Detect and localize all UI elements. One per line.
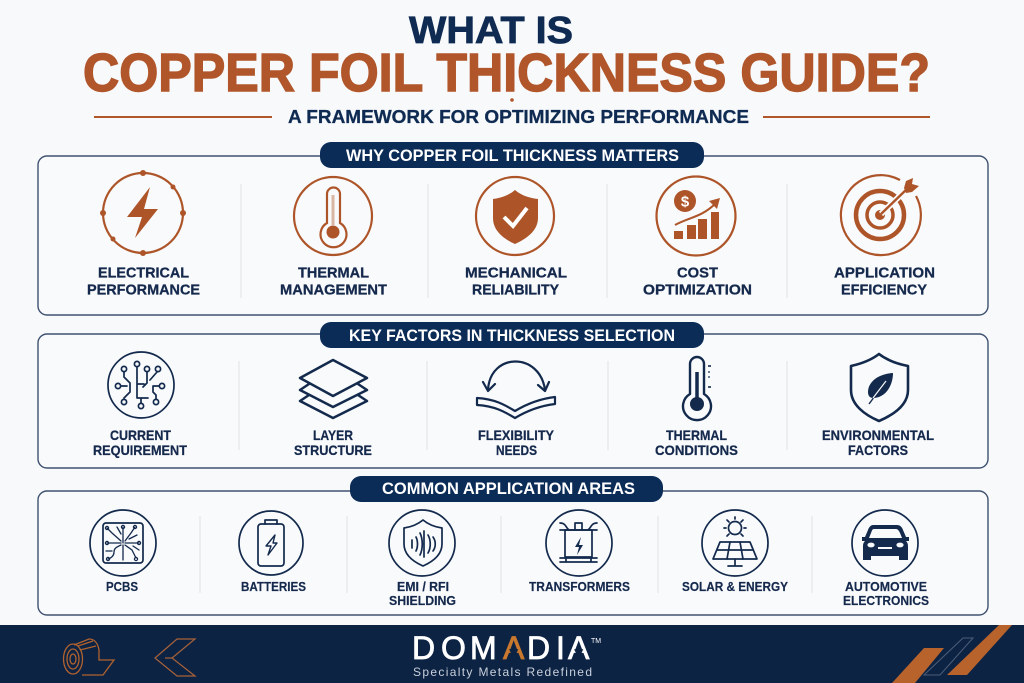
label: layer structure: STRUCTURE: [294, 442, 372, 458]
panel: key factors in thickness selection: [38, 322, 988, 468]
heading: common application areas: [350, 476, 663, 502]
label: EMI / RFI shielding: SHIELDING: [389, 593, 456, 608]
decorative stripes icon: [892, 625, 1012, 683]
label: cost optimization: OPTIMIZATION: [643, 282, 752, 298]
label: environmental factors: ENVIRONMENTAL: [822, 427, 934, 443]
title line 2: COPPER FOIL THICKNESS GUIDE?: [83, 43, 930, 103]
label: flexibility needs: [478, 427, 555, 458]
label: environmental factors: FACTORS: [848, 442, 908, 458]
icon: flexible foil with arrows: [477, 362, 555, 418]
label: EMI / RFI shielding: [389, 579, 456, 608]
heading: why it matters: WHY COPPER FOIL THICKNESS MATTERS: [346, 146, 679, 165]
tagline: Specialty Metals Redefined: [413, 665, 592, 679]
icon: shield with leaf: [851, 354, 908, 421]
logo: Domadia: TM: [591, 638, 601, 645]
label: thermal management: MANAGEMENT: [280, 282, 387, 298]
label: mechanical reliability: MECHANICAL: [465, 264, 567, 282]
label: PCBs: PCBS: [106, 579, 138, 594]
label: mechanical reliability: [465, 264, 567, 298]
icon: shield with check: [476, 177, 554, 255]
label: electrical performance: PERFORMANCE: [87, 282, 200, 298]
logo: Domadia: DOM: [412, 630, 497, 666]
label: current requirement: [93, 427, 187, 458]
heading: key factors: [320, 322, 704, 348]
label: solar & energy: SOLAR & ENERGY: [682, 579, 788, 594]
logo: Domadia: DIA: [527, 630, 590, 666]
label: mechanical reliability: RELIABILITY: [472, 282, 559, 298]
icon: EMI shield: [389, 510, 455, 576]
label: layer structure: [294, 427, 372, 458]
label: layer structure: LAYER: [313, 427, 353, 443]
heading: common application areas: COMMON APPLICATION AREAS: [382, 479, 635, 498]
logo: Domadia: A: [503, 630, 525, 666]
icon: thermometer with ticks: [683, 357, 711, 420]
icon: chevron: [155, 639, 195, 676]
logo: Domadia: [412, 630, 601, 666]
label: automotive electronics: AUTOMOTIVE: [845, 579, 927, 594]
label: application efficiency: EFFICIENCY: [841, 282, 927, 298]
label: current requirement: REQUIREMENT: [93, 442, 187, 458]
label: batteries: BATTERIES: [241, 579, 306, 594]
icon: car: [852, 510, 918, 576]
icon: solar panel and sun: [702, 510, 768, 576]
icon: battery: [239, 511, 303, 575]
footer band: [0, 625, 1024, 683]
icon: cost chart with coin: $: [681, 194, 690, 210]
heading: why it matters: [320, 142, 704, 168]
icon: PCB board: [90, 510, 156, 576]
title line 1: WHAT IS: [409, 10, 573, 52]
panel: common application areas: [38, 476, 988, 615]
label: current requirement: CURRENT: [110, 427, 171, 443]
subtitle with rules: A FRAMEWORK FOR OPTIMIZING PERFORMANCE: [288, 106, 749, 127]
label: flexibility needs: NEEDS: [496, 442, 537, 458]
icon: target with arrow: [841, 175, 921, 255]
panel: why copper foil thickness matters: [38, 142, 988, 315]
label: EMI / RFI shielding: EMI / RFI: [397, 579, 449, 594]
icon: foil roll: [64, 639, 114, 675]
label: application efficiency: APPLICATION: [834, 264, 935, 282]
label: electrical performance: ELECTRICAL: [98, 264, 189, 282]
label: thermal conditions: CONDITIONS: [655, 442, 738, 458]
label: thermal management: THERMAL: [298, 264, 369, 282]
label: electrical performance: [87, 264, 200, 298]
label: cost optimization: [643, 264, 752, 298]
label: automotive electronics: ELECTRONICS: [843, 593, 929, 608]
label: thermal conditions: THERMAL: [666, 427, 727, 443]
label: application efficiency: [834, 264, 935, 298]
icon: layered stack: [300, 360, 367, 418]
label: transformers: TRANSFORMERS: [529, 579, 630, 594]
label: automotive electronics: [843, 579, 929, 608]
label: thermal management: [280, 264, 387, 298]
label: cost optimization: COST: [677, 264, 718, 282]
icon: electrical lightning bolt: [100, 170, 186, 256]
heading: key factors: KEY FACTORS IN THICKNESS SELECTION: [349, 326, 675, 345]
label: flexibility needs: FLEXIBILITY: [478, 427, 555, 443]
label: thermal conditions: [655, 427, 738, 458]
title: [83, 10, 930, 103]
icon: transformer: [546, 510, 612, 576]
icon: circuit current: [108, 352, 174, 418]
icon: cost chart with coin: [656, 176, 736, 256]
icon: thermometer: [294, 177, 372, 255]
label: environmental factors: [822, 427, 934, 458]
